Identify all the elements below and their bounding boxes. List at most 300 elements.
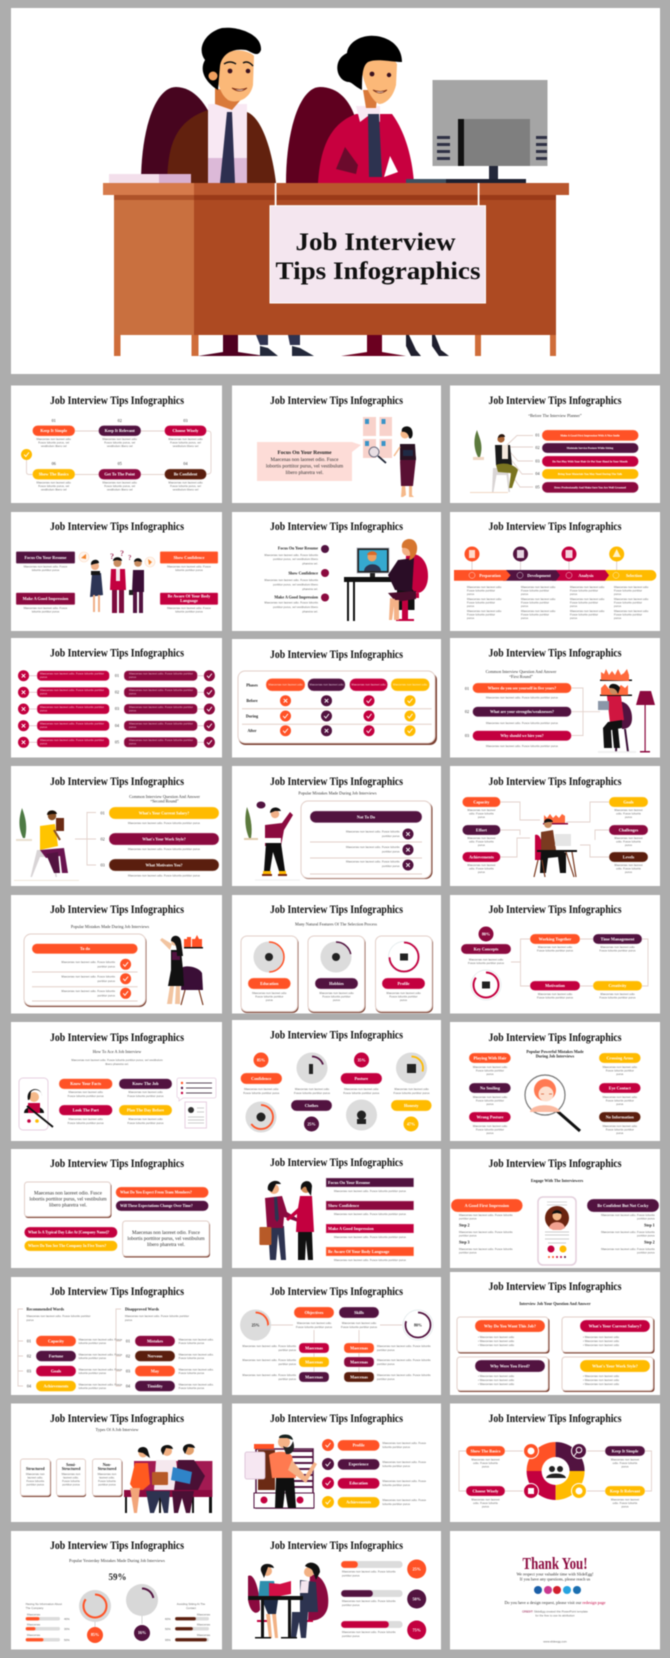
panel: focus on your resume bbox=[232, 386, 441, 503]
left steps: A Good First Impression bbox=[465, 1203, 510, 1208]
point list: Maecenas non laoreet odio. Fusce lobortis bbox=[264, 578, 319, 582]
left pills: No Smiling bbox=[480, 1085, 501, 1090]
skill pills: Maecenas non laoreet bbox=[467, 836, 496, 840]
illustration: paper stack bbox=[109, 174, 191, 183]
callout: libero pharetra vel. bbox=[286, 471, 323, 476]
phase bullet lists: purus bbox=[521, 592, 529, 596]
concept pills: Maecenas non laoreet odio bbox=[538, 992, 573, 996]
corner icons bbox=[524, 1444, 586, 1498]
illustration: three colleagues with question marks: ? bbox=[110, 552, 114, 561]
subheading: Common Interview Question And Answer bbox=[129, 794, 200, 799]
question pills bottom bbox=[24, 1227, 117, 1251]
question pills: What's Your Current Salary? bbox=[139, 810, 189, 816]
percent badges: 50% bbox=[413, 1596, 421, 1602]
topic pills: Confidence bbox=[251, 1076, 272, 1081]
point list: Focus On Your Resume bbox=[278, 546, 318, 550]
percentage badges: 35% bbox=[357, 1058, 366, 1062]
callout: lobortis porttitor purus, vel vestibulum bbox=[266, 464, 343, 470]
left steps: Maecenas non laoreet odio. Fusce lobortis bbox=[459, 1247, 513, 1251]
recommended words: lobortis porttitor purus bbox=[79, 1356, 107, 1360]
tip pills: purus bbox=[621, 1464, 629, 1468]
subheading: libero pharetra vel. bbox=[105, 1062, 129, 1066]
topic pills: Maecenas non laoreet odio bbox=[394, 1087, 429, 1091]
question pills: 03 bbox=[465, 733, 469, 738]
illustration: computer monitor bbox=[406, 80, 548, 183]
progress bars: Maecenas non laoreet odio. Fusce lobortis bbox=[342, 1630, 396, 1634]
disapproved words: Fusce lobortis purus bbox=[179, 1386, 205, 1390]
disapproved words: Disapproved Words bbox=[125, 1306, 159, 1312]
left steps: Step 3 bbox=[459, 1240, 470, 1244]
panel: not to do bbox=[232, 766, 441, 886]
list bars bbox=[326, 1178, 414, 1262]
panel: to do list bbox=[11, 895, 222, 1014]
header pill bbox=[310, 811, 422, 823]
list numbers: 01 bbox=[535, 432, 540, 438]
phase bullet lists: purus bbox=[467, 604, 475, 608]
illustration: handshake bbox=[259, 1181, 314, 1260]
progress bars: Maecenas non laoreet odio. Fusce lobortis bbox=[342, 1570, 396, 1574]
concept pills: Maecenas non laoreet odio bbox=[600, 992, 635, 996]
item list: Maecenas non laoreet odio. Fusce bbox=[382, 1498, 427, 1502]
answer bullets: • Maecenas non laoreet odio bbox=[478, 1378, 515, 1382]
panel: key concepts bbox=[450, 895, 660, 1014]
note card top: Maecenas non laoreet odio. Fusce bbox=[34, 1192, 103, 1196]
heading: Job Interview Tips Infographics bbox=[270, 776, 403, 788]
phase bullet lists: Fusce lobortis porttitor bbox=[570, 612, 598, 616]
answer bullets: • Maecenas non laoreet odio bbox=[583, 1374, 620, 1378]
illustration: man interviewer bbox=[141, 28, 276, 183]
left list: Maecenas bbox=[305, 1359, 323, 1364]
right column: purus bbox=[129, 675, 137, 679]
list bars: Make A Good Impression bbox=[328, 1226, 374, 1231]
type cards: Fusce lobortis bbox=[26, 1479, 45, 1483]
items: porttitor purus bbox=[382, 850, 400, 854]
percentage badges: 47% bbox=[407, 1122, 415, 1126]
right pills: Fusce lobortis porttitor bbox=[606, 1068, 634, 1072]
question pills: Maecenas non laoreet odio. Fusce lobortis porttitor purus bbox=[486, 696, 559, 700]
panel: first round questions bbox=[450, 638, 660, 758]
heading: Job Interview Tips Infographics bbox=[488, 1158, 622, 1170]
items: Maecenas non laoreet odio. Fusce lobortis bbox=[346, 860, 400, 864]
skill pills: Effort bbox=[476, 827, 487, 832]
question pills: Why Do You Want This Job? bbox=[484, 1324, 536, 1328]
step numbers and notes: Fusce lobortis purus, vel bbox=[38, 484, 69, 488]
point list: pharetra vel. bbox=[302, 610, 318, 614]
left pills: Playing With Hair bbox=[474, 1055, 507, 1060]
type cards: Fusce lobortis bbox=[62, 1479, 80, 1483]
percentage badges: 85% bbox=[257, 1058, 265, 1062]
right steps: Step 1 bbox=[644, 1222, 655, 1228]
question pills: What's Your Work Style? bbox=[592, 1364, 638, 1368]
items bbox=[61, 959, 131, 999]
panel: donut of four tips bbox=[450, 1404, 660, 1522]
disapproved words: Maecenas non laoreet odio. bbox=[179, 1352, 214, 1356]
note card top bbox=[24, 1182, 112, 1218]
step numbers and notes: vestibulum libero vel bbox=[41, 444, 67, 448]
card bbox=[301, 801, 432, 879]
feature labels: purus bbox=[400, 998, 408, 1002]
right list: Maecenas non laoreet odio. Fusce lobortis bbox=[377, 1358, 431, 1362]
right column: purus bbox=[129, 708, 137, 712]
left stats: Maecenas bbox=[27, 1622, 41, 1626]
left steps bbox=[451, 1199, 523, 1254]
phase bullet lists: Maecenas non laoreet odio bbox=[570, 609, 605, 613]
type cards: Maecenas non bbox=[62, 1472, 81, 1476]
panel: powerful mistakes bbox=[450, 1022, 660, 1141]
skill pills: Levels bbox=[623, 854, 635, 859]
question pills: Why Were You Fired? bbox=[490, 1364, 530, 1368]
panel: question cards bbox=[450, 1272, 660, 1395]
progress rings bbox=[240, 1310, 433, 1340]
heading: Job Interview Tips Infographics bbox=[50, 1413, 184, 1425]
question pills top bbox=[116, 1187, 208, 1211]
tip pills: Fusce lobortis porttitor purus bbox=[68, 1121, 104, 1125]
left column: Maecenas non laoreet odio. Fusce lobortis porttitor bbox=[40, 672, 104, 676]
left list: porttitor purus bbox=[278, 1377, 297, 1381]
item list: Maecenas non laoreet odio. Fusce bbox=[382, 1460, 427, 1464]
step numbers and notes: 02 bbox=[118, 418, 122, 423]
concept pills: Maecenas non laoreet odio bbox=[538, 945, 573, 949]
question pills top: Will These Expectations Change Over Time? bbox=[120, 1204, 193, 1208]
right column: Maecenas non laoreet odio. Fusce lobortis porttitor bbox=[129, 688, 193, 692]
table headers: Maecenas non laoreet odio bbox=[351, 683, 386, 687]
right list: porttitor purus bbox=[377, 1377, 395, 1381]
right column: purus bbox=[129, 742, 137, 746]
right pills bbox=[599, 1053, 641, 1135]
left list: Maecenas non laoreet odio. Fusce lobortis bbox=[242, 1344, 297, 1348]
left column: purus bbox=[40, 675, 48, 679]
question pills: 02 bbox=[101, 836, 105, 842]
heading: Job Interview Tips Infographics bbox=[50, 648, 184, 660]
subheading: Common Interview Question And Answer bbox=[486, 669, 557, 674]
thank you message: If you have any questions, please reach us bbox=[520, 1576, 591, 1582]
tip notes: lobortis porttitor purus bbox=[175, 610, 203, 614]
recommended words: Achievements bbox=[44, 1384, 69, 1388]
panel: profile, experience, education, achievements bbox=[232, 1404, 441, 1522]
phase bullet lists: purus bbox=[614, 604, 622, 608]
illustration: woman at computer bbox=[344, 539, 428, 621]
tip pills: Plan The Day Before bbox=[127, 1107, 164, 1112]
type cards: Non- bbox=[103, 1462, 112, 1467]
panel: do and do not list bbox=[11, 638, 222, 758]
icons: social links bbox=[534, 1586, 581, 1594]
step numbers and notes: Fusce lobortis purus, vel bbox=[104, 440, 135, 444]
right steps: Step 2 bbox=[644, 1240, 655, 1244]
heading: Job Interview Tips Infographics bbox=[488, 521, 622, 533]
header pill bbox=[32, 944, 138, 954]
disapproved words: Maecenas non laoreet odio. Fusce lobortis porttitor bbox=[125, 1314, 189, 1318]
row numbers: 02 bbox=[115, 690, 119, 694]
items: Maecenas non laoreet odio. Fusce lobortis bbox=[61, 989, 116, 993]
step numbers and notes: Fusce lobortis purus, vel bbox=[170, 484, 201, 488]
recommended words bbox=[26, 1306, 123, 1391]
topic pills: Posture bbox=[354, 1076, 368, 1081]
answer bullets: • Maecenas non laoreet odio bbox=[583, 1335, 620, 1339]
right column: Maecenas non laoreet odio. Fusce lobortis porttitor bbox=[129, 722, 193, 726]
right stats: 60% bbox=[165, 1617, 171, 1621]
question pills bottom: What Is A Typical Day Like At [Company Name]? bbox=[28, 1230, 109, 1234]
phase bullet lists: Fusce lobortis porttitor bbox=[570, 600, 598, 604]
resume sheets and magnifier bbox=[363, 417, 392, 463]
tip boxes: Show Confidence bbox=[173, 555, 205, 560]
illustration: seated woman and plant bbox=[470, 430, 518, 493]
topic pills: Maecenas non laoreet odio bbox=[344, 1087, 379, 1091]
thank you heading: Thank You! bbox=[522, 1554, 588, 1573]
key concept node: Fusce lobortis porttitor purus bbox=[468, 961, 505, 965]
step pills: Be Confident bbox=[174, 472, 198, 476]
header pills: Skills bbox=[354, 1310, 364, 1315]
phase bullet lists: Maecenas non laoreet odio bbox=[614, 609, 649, 613]
heading: Job Interview Tips Infographics bbox=[488, 1281, 622, 1293]
phase bullet lists: purus bbox=[467, 592, 475, 596]
heading: Job Interview Tips Infographics bbox=[270, 904, 403, 916]
right pills: Fusce lobortis porttitor bbox=[606, 1128, 634, 1132]
skill pills: Maecenas non laoreet bbox=[614, 863, 643, 867]
items: Maecenas non laoreet odio. Fusce lobortis bbox=[61, 974, 116, 978]
note card top: libero pharetra vel. bbox=[49, 1204, 87, 1208]
phase bullet lists: purus bbox=[521, 616, 529, 620]
tip boxes: Make A Good Impression bbox=[23, 596, 69, 601]
step numbers and notes: vestibulum libero vel bbox=[173, 488, 199, 492]
phase bullet lists: Maecenas non laoreet odio bbox=[614, 597, 649, 601]
right pills: purus bbox=[616, 1131, 624, 1135]
progress bars: porttitor purus bbox=[342, 1634, 360, 1638]
question pills bbox=[465, 683, 571, 748]
panel: 59 percent statistics bbox=[11, 1531, 222, 1650]
phase bullet lists bbox=[467, 585, 649, 620]
tip pills: purus bbox=[482, 1504, 490, 1508]
phase bullet lists: Fusce lobortis porttitor bbox=[614, 612, 642, 616]
right pills: Maecenas non laoreet odio bbox=[603, 1065, 637, 1069]
check badge bbox=[21, 449, 32, 460]
right stats: Maecenas bbox=[197, 1612, 211, 1616]
left list: Maecenas bbox=[305, 1374, 323, 1379]
feature labels: purus bbox=[266, 998, 273, 1002]
resume card bbox=[185, 1102, 206, 1128]
skill pills: Challenges bbox=[619, 827, 639, 832]
subheading: During Job Interviews bbox=[536, 1054, 575, 1058]
skill pills: odio. Fusce lobortis bbox=[616, 840, 641, 844]
point list: porttitor purus, vel vestibulum libero bbox=[273, 605, 318, 609]
headline figure: 59% bbox=[108, 1572, 126, 1582]
tip boxes bbox=[16, 552, 218, 605]
recommended words: Maecenas non laoreet odio. Fusce bbox=[79, 1352, 123, 1356]
phase bullet lists: Maecenas non laoreet odio bbox=[521, 585, 556, 589]
disapproved words: 03 bbox=[126, 1368, 130, 1374]
header pill: To do bbox=[80, 946, 90, 951]
feature labels: Maecenas non laoreet odio bbox=[319, 991, 354, 995]
panel: skills mind map bbox=[450, 766, 660, 886]
heading: Job Interview Tips Infographics bbox=[488, 648, 622, 660]
item list: Experience bbox=[349, 1462, 369, 1467]
type cards: Maecenas non bbox=[26, 1472, 45, 1476]
topic pills: Fusce lobortis porttitor purus bbox=[243, 1091, 280, 1095]
connector bbox=[572, 688, 600, 736]
left stats: 50% bbox=[64, 1638, 70, 1642]
illustration: woman interviewer bbox=[286, 36, 414, 183]
items: porttitor purus bbox=[97, 964, 116, 968]
subheading: How To Ace A Job Interview bbox=[93, 1049, 141, 1054]
note card bottom bbox=[123, 1221, 210, 1258]
panel: keep it simple process bbox=[11, 386, 222, 503]
right column bbox=[124, 670, 215, 748]
phase bullet lists: Fusce lobortis porttitor bbox=[467, 600, 495, 604]
question pills top: What Do You Expect From Team Members? bbox=[120, 1190, 192, 1194]
question pills: What's Your Current Salary? bbox=[589, 1324, 641, 1328]
illustration: woman with resume bbox=[394, 426, 416, 497]
left list: porttitor purus bbox=[278, 1348, 297, 1352]
question pills: Why should we hire you? bbox=[500, 733, 544, 738]
question pills bbox=[101, 807, 219, 878]
phase bullet lists: Fusce lobortis porttitor bbox=[521, 600, 549, 604]
feature labels: purus bbox=[333, 998, 341, 1002]
list numbers: 05 bbox=[535, 484, 540, 490]
sign: title: Tips Infographics bbox=[276, 258, 481, 285]
point list: porttitor purus, vel vestibulum libero bbox=[273, 582, 318, 586]
skill pills: odio. Fusce lobortis bbox=[469, 866, 494, 870]
brackets bbox=[18, 1309, 121, 1386]
left stats: 30% bbox=[64, 1627, 70, 1631]
recommended words: 03 bbox=[27, 1368, 31, 1374]
right column: Maecenas non laoreet odio. Fusce lobortis porttitor bbox=[129, 705, 193, 709]
table headers: Phases bbox=[246, 682, 258, 688]
question pills: Where do you see yourself in five years? bbox=[488, 686, 556, 690]
question pills bbox=[475, 1320, 650, 1372]
item list: Maecenas non laoreet odio. Fusce bbox=[382, 1441, 427, 1445]
disapproved words: Maecenas non laoreet odio. bbox=[179, 1382, 214, 1386]
subheading bbox=[526, 1049, 584, 1058]
table rows: After bbox=[247, 728, 257, 733]
skill pills: Maecenas non laoreet bbox=[614, 808, 643, 812]
process path bbox=[26, 431, 211, 474]
tip pills: odio. Fusce lobortis bbox=[473, 1501, 498, 1505]
step numbers and notes: vestibulum libero vel bbox=[173, 444, 199, 448]
point list: Maecenas non laoreet odio. Fusce lobortis bbox=[264, 600, 319, 604]
header pills: Fusce lobortis porttitor purus bbox=[341, 1325, 378, 1329]
disapproved words: 02 bbox=[126, 1354, 130, 1358]
skill pills: Maecenas non laoreet bbox=[614, 836, 643, 840]
heading: Job Interview Tips Infographics bbox=[270, 521, 403, 533]
answer bullets bbox=[478, 1335, 620, 1386]
left list: Maecenas non laoreet odio. Fusce lobortis bbox=[242, 1358, 297, 1362]
phase band bbox=[454, 570, 656, 581]
panel: handshake bbox=[232, 1149, 441, 1268]
tip pills: Maecenas non laoreet bbox=[471, 1458, 500, 1462]
planner pills: Make A Good First Impression With A Nice Smile bbox=[560, 434, 620, 438]
phase bullet lists: Fusce lobortis porttitor bbox=[614, 588, 642, 592]
step numbers and notes: 04 bbox=[183, 461, 188, 466]
step numbers and notes: vestibulum libero vel bbox=[107, 488, 133, 492]
answer bullets: • Maecenas non laoreet odio bbox=[583, 1339, 620, 1343]
phase bullet lists: Fusce lobortis porttitor bbox=[521, 612, 549, 616]
tip notes: Maecenas non laoreet odio. Fusce bbox=[24, 564, 68, 568]
left steps: porttitor purus bbox=[459, 1234, 477, 1238]
disapproved words: Mistakes bbox=[147, 1338, 163, 1344]
concept pills: Motivation bbox=[545, 983, 566, 988]
feature labels: Hobbies bbox=[329, 981, 344, 986]
skill pills: Maecenas non laoreet bbox=[467, 808, 496, 812]
tip pills: Maecenas non laoreet bbox=[611, 1458, 639, 1462]
left list: Maecenas bbox=[305, 1345, 323, 1350]
left list: porttitor purus bbox=[278, 1362, 297, 1366]
key concept node: 80% bbox=[482, 932, 490, 936]
heading: Job Interview Tips Infographics bbox=[50, 1540, 184, 1552]
list bars: Be Aware Of Your Body Language bbox=[328, 1249, 390, 1254]
step numbers and notes: 06 bbox=[52, 461, 56, 466]
tip pills: Maecenas non laoreet odio bbox=[69, 1090, 103, 1094]
phase bullet lists: purus bbox=[570, 616, 578, 620]
answer bullets: • Maecenas non laoreet odio bbox=[478, 1339, 515, 1343]
right list bbox=[344, 1343, 431, 1382]
point list: pharetra vel. bbox=[302, 562, 318, 566]
right steps: porttitor purus bbox=[637, 1250, 655, 1254]
right list: porttitor purus bbox=[377, 1362, 395, 1366]
center rings: 16% bbox=[138, 1630, 146, 1635]
feature labels: Fusce lobortis porttitor bbox=[322, 994, 351, 998]
illustration: three colleagues with question marks: ? bbox=[128, 554, 132, 562]
tip boxes: Be Aware Of Your Body bbox=[168, 594, 211, 598]
connectors bbox=[500, 802, 609, 857]
donut chart bbox=[527, 1442, 585, 1500]
left pills bbox=[469, 1053, 511, 1135]
skill pills: purus bbox=[478, 870, 486, 874]
items: porttitor purus bbox=[97, 979, 116, 983]
progress rings bbox=[254, 942, 420, 972]
right pills: Maecenas non laoreet odio bbox=[603, 1095, 637, 1099]
left column: Maecenas non laoreet odio. Fusce lobortis porttitor bbox=[40, 722, 104, 726]
left pills: purus bbox=[486, 1131, 494, 1135]
phone illustration bbox=[538, 1197, 576, 1265]
left pills: purus bbox=[486, 1102, 494, 1106]
subheading: Maecenas non laoreet odio. Fusce lobortis porttitor purus, vel vestibulum bbox=[71, 1058, 163, 1062]
feature labels: Education bbox=[260, 981, 279, 986]
subheading: Interview Job Your Question And Answer bbox=[519, 1301, 591, 1306]
left column: purus bbox=[40, 742, 48, 746]
concept pills: Fusce lobortis porttitor purus bbox=[599, 948, 636, 952]
step numbers and notes: Maecenas non laoreet odio bbox=[103, 437, 137, 441]
concept pills: Time Management bbox=[601, 936, 635, 941]
right column: purus bbox=[129, 692, 137, 696]
list numbers: 04 bbox=[535, 471, 540, 476]
concept pills: Fusce lobortis porttitor purus bbox=[537, 948, 574, 952]
question pills: 01 bbox=[101, 810, 105, 816]
tip pills: Keep It Simple bbox=[612, 1448, 639, 1453]
tip pills: Maecenas non laoreet odio bbox=[128, 1090, 163, 1094]
step pills bbox=[32, 426, 206, 480]
panel: phases table bbox=[232, 639, 441, 758]
tip notes bbox=[24, 564, 211, 614]
table card bbox=[238, 671, 437, 745]
left stats: Maecenas bbox=[27, 1612, 41, 1616]
row numbers bbox=[115, 673, 120, 744]
right column: purus bbox=[129, 725, 137, 729]
right column: Maecenas non laoreet odio. Fusce lobortis porttitor bbox=[129, 672, 193, 676]
table headers bbox=[246, 678, 430, 691]
left pills: Maecenas non laoreet odio bbox=[473, 1124, 508, 1128]
type cards: laoreet odio. bbox=[99, 1476, 115, 1480]
right pills: Maecenas non laoreet odio bbox=[603, 1124, 637, 1128]
type cards: laoreet odio. bbox=[27, 1476, 43, 1480]
item list: Achievements bbox=[346, 1500, 371, 1505]
tip pills: Fusce lobortis porttitor purus bbox=[68, 1094, 104, 1098]
tip pills: odio. Fusce lobortis bbox=[613, 1461, 638, 1465]
skill pills: purus bbox=[478, 815, 486, 819]
phase bullet lists: Maecenas non laoreet odio bbox=[521, 609, 556, 613]
right stats bbox=[165, 1602, 211, 1642]
panel: objectives and skills bbox=[232, 1277, 441, 1395]
item list: Maecenas non laoreet odio. Fusce bbox=[382, 1479, 427, 1483]
tip notes: lobortis porttitor purus bbox=[32, 568, 60, 572]
